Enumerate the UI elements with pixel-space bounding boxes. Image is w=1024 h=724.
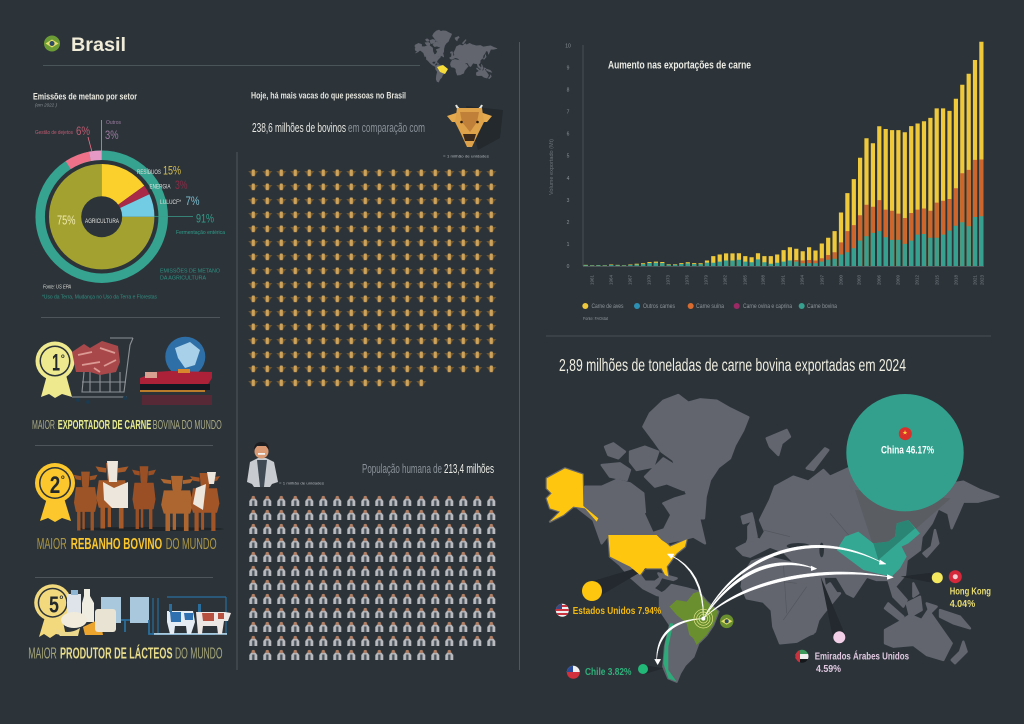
- caption: maior exportador: EXPORTADOR DE CARNE: [58, 417, 151, 432]
- legend: Carne bovina: [807, 304, 838, 310]
- label: Gestão de dejetos: 6%: [76, 124, 90, 138]
- country: Alaska: [547, 468, 598, 522]
- bubble: China: [846, 394, 964, 511]
- x axis with years: 2021: [973, 274, 978, 285]
- label: Outros: Outros: [106, 120, 121, 126]
- y axis label: Volume exportado (Mt): [549, 139, 555, 195]
- x axis with years: 2006: [876, 274, 881, 285]
- arrows: [655, 545, 893, 665]
- label: 75%: 75%: [57, 212, 76, 228]
- pictogram: cows: [246, 166, 498, 390]
- y axis: 5: [567, 154, 570, 160]
- x axis with years: 2015: [934, 274, 939, 285]
- caption: maior produtor: DO MUNDO: [175, 646, 222, 662]
- donut chart: [40, 120, 193, 278]
- icon: Brazil flag: [44, 36, 60, 52]
- label: Hong Kong: 4.04%: [950, 598, 976, 610]
- icon: bull head: [447, 105, 503, 150]
- label: LULUCF: [160, 194, 200, 208]
- chart title: Aumento nas exportações de carne: [608, 60, 751, 72]
- label: Resíduos: [137, 164, 181, 178]
- x axis with years: 2009: [895, 274, 900, 285]
- x axis with years: 1970: [646, 274, 651, 285]
- x axis with years: 1994: [800, 274, 805, 285]
- callout cone: China: [855, 490, 951, 562]
- icon: shopping cart with meat: [72, 338, 133, 404]
- label: Energia: 3%: [175, 178, 188, 192]
- label: Agricultura: AGRICULTURA: [85, 219, 119, 225]
- icon: herd of cows: [74, 461, 224, 531]
- medal: 5th: o: [60, 595, 64, 601]
- y axis: 3: [567, 198, 570, 204]
- label: 91% fermentação entérica: [176, 212, 226, 236]
- caption: maior exportador: BOVINA DO MUNDO: [153, 417, 222, 432]
- legend: Outros carnes: [643, 304, 675, 310]
- label: Energia: [150, 178, 188, 192]
- label: United Arab Emirates: Emirados Árabes Unidos: [815, 650, 909, 662]
- x axis with years: 2003: [857, 274, 862, 285]
- y axis: 9: [567, 66, 570, 72]
- label: United Arab Emirates: [795, 631, 909, 675]
- x axis with years: [583, 266, 985, 285]
- x axis with years: 1973: [666, 274, 671, 285]
- icon: cargo ship: [140, 369, 212, 405]
- label: LULUCF: LULUCF*: [160, 200, 182, 206]
- label: United States: [555, 581, 662, 618]
- panel: largest beef exporter: [32, 337, 222, 432]
- icon: globe: [165, 337, 205, 377]
- label: Resíduos: 15%: [163, 164, 181, 178]
- medal: 1st: 1: [52, 350, 60, 376]
- x axis with years: 2018: [954, 274, 959, 285]
- x axis with years: 1967: [628, 274, 633, 285]
- unit note: cows: = 1 milhão de unidades: [443, 154, 489, 158]
- label: United States: Estados Unidos 7.94%: [573, 605, 662, 617]
- caption: maior rebanho: REBANHO BOVINO: [71, 536, 162, 553]
- label: Hong Kong: Hong Kong: [950, 586, 991, 598]
- stacked bars: [586, 42, 981, 266]
- medal: 5th: [34, 584, 71, 638]
- shadow: UAE callout: [821, 577, 846, 637]
- caption: maior produtor: MAIOR: [28, 646, 57, 662]
- y axis: 6: [567, 132, 570, 138]
- panel: cows vs people: [246, 90, 503, 662]
- header: Brasil: [43, 30, 497, 82]
- label: 91% fermentação entérica: 91%: [196, 212, 214, 226]
- label: Chile: Chile 3.82%: [585, 666, 632, 678]
- shadow: Hong Kong callout: [901, 573, 932, 583]
- label: Outros: [105, 120, 121, 142]
- caption: maior exportador: MAIOR: [32, 417, 55, 432]
- heading: Emissões de metano por setor: [33, 92, 137, 102]
- label: Energia: ENERGIA: [150, 184, 170, 190]
- x axis with years: 1979: [704, 274, 709, 285]
- population count: População humana de: [362, 461, 442, 476]
- legend: Carne de aves: [592, 304, 624, 310]
- icon: milking cows: [153, 597, 231, 635]
- legend: Carne suína: [696, 304, 725, 310]
- title: Brasil: [71, 35, 126, 56]
- x axis with years: 1964: [608, 274, 613, 285]
- heading: Hoje, há mais vacas do que pessoas no Brasil: [251, 90, 406, 100]
- label: LULUCF: 7%: [186, 194, 200, 208]
- y axis: 1: [567, 242, 570, 248]
- icon: Brazil flag on map: [720, 614, 734, 628]
- bubble: China: China 46.17%: [881, 444, 934, 456]
- x axis with years: 2023: [980, 274, 985, 285]
- x axis with years: 2000: [838, 274, 843, 285]
- x axis with years: 1991: [780, 274, 785, 285]
- unit note: people: = 1 milhão de unidades: [279, 480, 324, 486]
- y axis: 2: [567, 220, 570, 226]
- y axis: 7: [567, 110, 570, 116]
- medal: 1st: [36, 342, 74, 398]
- icon: mini world map: [415, 30, 497, 82]
- shadow: Chile callout: [643, 665, 663, 674]
- medal: 5th: 5: [49, 592, 59, 618]
- country: Brazil: [669, 592, 718, 645]
- label: emissões da agricultura: DA AGRICULTURA: [160, 276, 207, 282]
- origin target: Brazil: [694, 609, 713, 628]
- cattle count: 238,6 milhões de bovinos: [252, 120, 346, 135]
- y axis: 0: [567, 264, 570, 270]
- medal: 2nd: [35, 463, 75, 522]
- medal: 2nd: 2: [50, 472, 60, 499]
- cattle count: em comparação com: [348, 120, 425, 135]
- label: Gestão de dejetos: Gestão de dejetos: [35, 130, 73, 136]
- x axis with years: 1997: [819, 274, 824, 285]
- y axis: 4: [567, 176, 570, 182]
- label: emissões da agricultura: [160, 268, 220, 282]
- shadow: USA callout: [587, 557, 667, 595]
- year note: (em 2022 ): [35, 102, 58, 108]
- icon: man in suit: [247, 442, 278, 487]
- caption: maior produtor: PRODUTOR DE LÁCTEOS: [60, 644, 173, 662]
- legend: Carne ovina e caprina: [743, 304, 793, 310]
- label: emissões da agricultura: EMISSÕES DE METANO: [160, 268, 220, 274]
- label: United Arab Emirates: 4.59%: [816, 663, 842, 675]
- source: Fonte: US EPA: [43, 284, 72, 290]
- label: Resíduos: RESÍDUOS: [137, 169, 161, 176]
- label: Hong Kong: [932, 570, 991, 610]
- pictogram: people: [246, 494, 498, 662]
- x axis with years: 1988: [761, 274, 766, 285]
- footnote: *Uso da Terra, Mudança no Uso da Terra e Florestas: [42, 294, 157, 300]
- x axis with years: 1982: [723, 274, 728, 285]
- medal: 1st: o: [61, 354, 65, 360]
- country: Chile: [663, 623, 677, 682]
- x axis with years: 1961: [590, 274, 595, 285]
- panel: fifth dairy producer: [28, 584, 231, 662]
- panel: methane emissions by sector: [33, 92, 226, 300]
- caption: maior rebanho: MAIOR: [37, 536, 67, 553]
- country: China: [837, 520, 920, 577]
- country: United States: [608, 535, 687, 577]
- label: Gestão de dejetos: [35, 124, 90, 138]
- label: 91% fermentação entérica: Fermentação entérica: [176, 230, 226, 236]
- x axis with years: 1985: [742, 274, 747, 285]
- caption: maior produtor: [28, 644, 222, 662]
- label: Outros: 3%: [105, 128, 119, 142]
- icon: dairy products: [54, 589, 215, 636]
- panel: second largest herd: [35, 461, 224, 553]
- panel: world map: [547, 394, 998, 682]
- x axis with years: 1976: [684, 274, 689, 285]
- medal: 2nd: o: [61, 475, 65, 481]
- world map: [547, 395, 998, 682]
- y axis: 10: [565, 44, 571, 50]
- population count: 213,4 milhões: [444, 461, 494, 476]
- source: Fonte: FAOstat: [583, 316, 609, 321]
- panel: meat exports chart: [549, 42, 985, 321]
- x axis with years: 2012: [915, 274, 920, 285]
- caption: maior rebanho: DO MUNDO: [166, 536, 217, 553]
- y axis: [565, 44, 583, 270]
- legend: [582, 303, 838, 310]
- y axis: 8: [567, 88, 570, 94]
- label: Chile: [566, 664, 648, 680]
